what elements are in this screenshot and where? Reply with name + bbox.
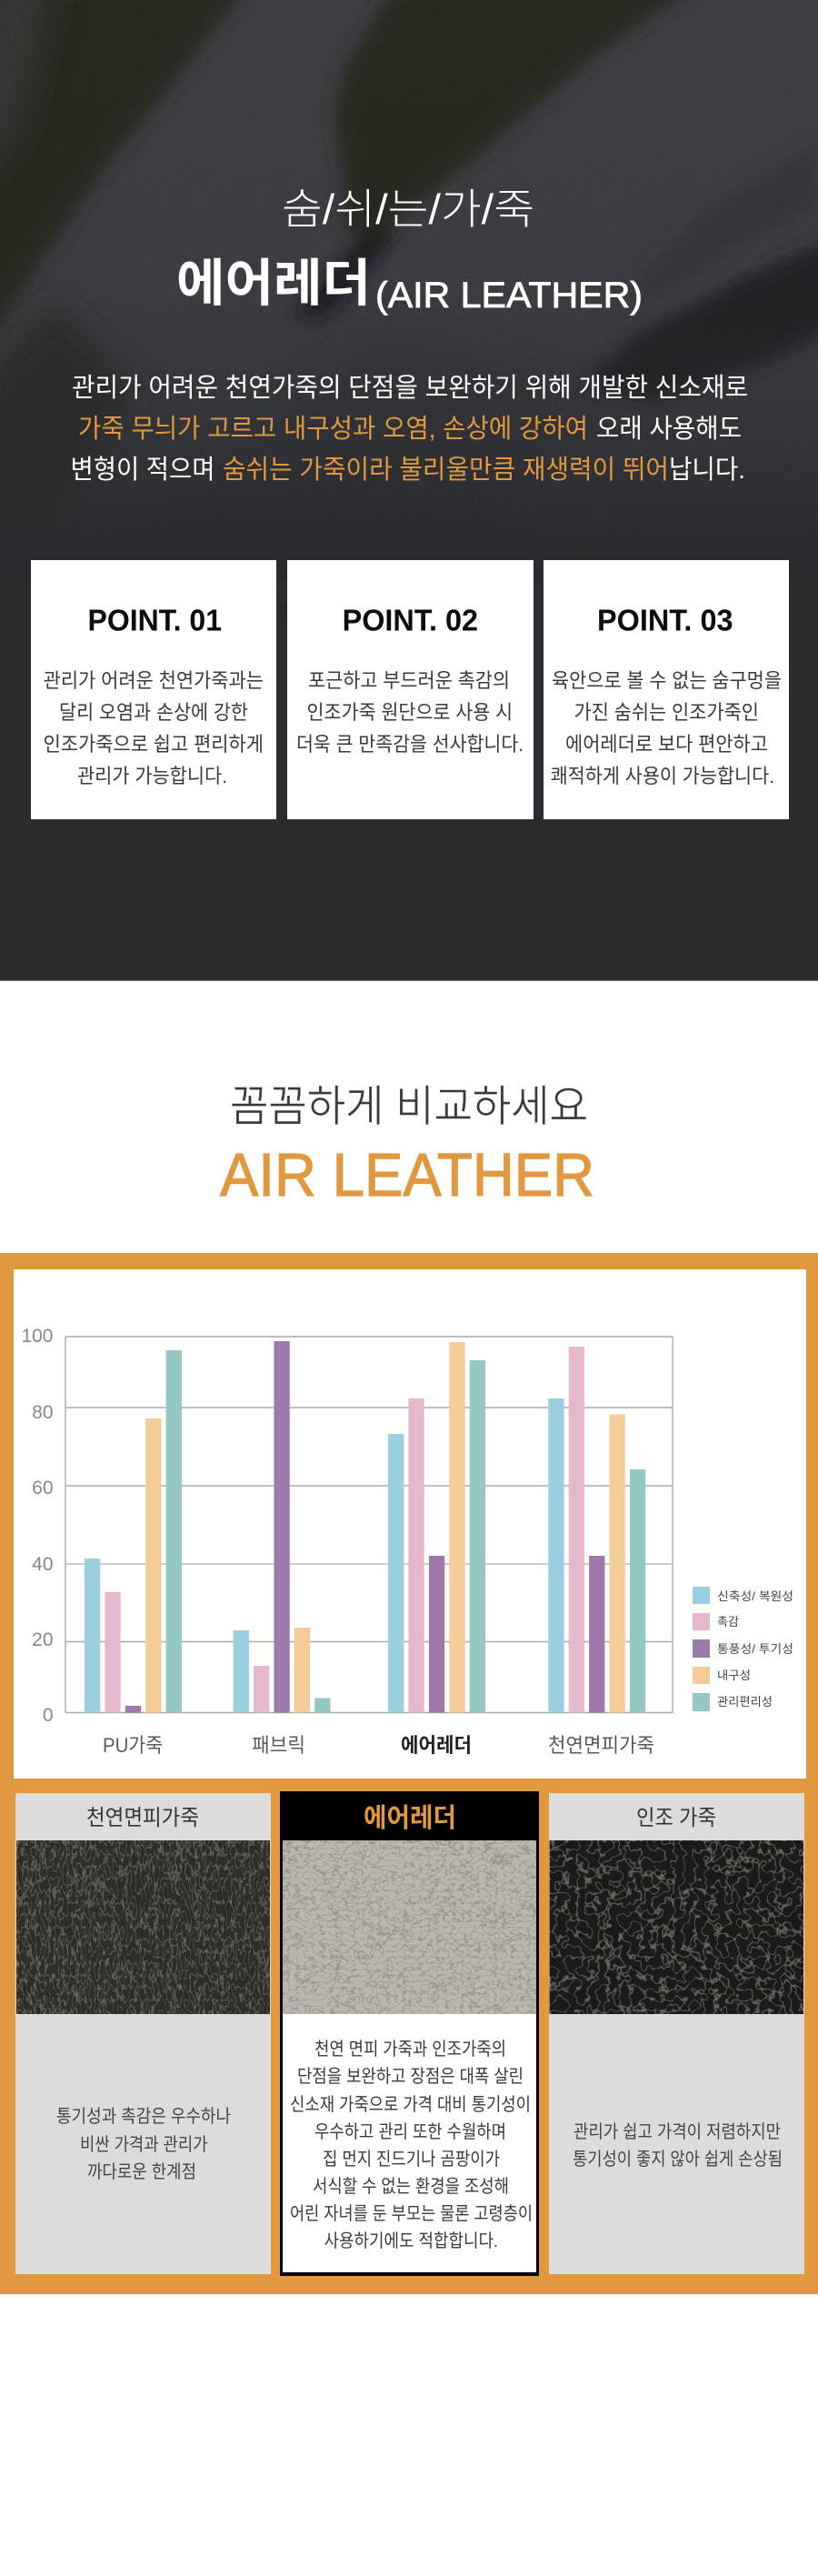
- natural leather text: [56, 2106, 231, 2182]
- point 01 text: 인조가죽으로 쉽고 편리하게: [44, 733, 264, 756]
- orange comparison background: [0, 1253, 818, 2294]
- natural leather swatch: [16, 1840, 270, 2014]
- artificial leather heading: 인조 가죽: [636, 1806, 716, 1830]
- point 03 text: 육안으로 볼 수 없는 숨구멍을: [552, 669, 782, 692]
- bars: 에어레더: [388, 1342, 485, 1713]
- point 01 text: 관리가 어려운 천연가죽과는: [44, 669, 264, 692]
- air leather heading: 에어레더: [364, 1803, 456, 1833]
- chart legend: [693, 1587, 793, 1711]
- panel: point 03: [544, 560, 789, 819]
- chart legend: 관리편리성: [717, 1695, 773, 1709]
- air leather text: 우수하고 관리 또한 수월하며: [314, 2121, 506, 2142]
- point 02 text: [296, 669, 524, 756]
- y axis labels: 0: [43, 1705, 53, 1726]
- point 03 text: 쾌적하게 사용이 가능합니다.: [551, 765, 774, 787]
- panel: point 02: [287, 560, 534, 819]
- hero subtitle: 숨/쉬/는/가/죽: [282, 185, 534, 233]
- bars: 패브릭: [234, 1341, 331, 1713]
- air leather text: 천연 면피 가죽과 인조가죽의: [314, 2039, 506, 2060]
- point 01 text: 관리가 가능합니다.: [77, 765, 227, 787]
- air leather text: 서식할 수 없는 환경을 조성해: [313, 2176, 509, 2197]
- leather folds backdrop: [0, 0, 818, 582]
- artificial leather swatch: [549, 1840, 803, 2014]
- category labels: 패브릭: [252, 1734, 305, 1757]
- section heading: air leather: AIR LEATHER: [220, 1141, 594, 1209]
- y axis labels: [21, 1326, 53, 1726]
- hero description: 관리가 어려운 천연가죽의 단점을 보완하기 위해 개발한 신소재로: [72, 373, 748, 403]
- hero section: dark leather background: [0, 0, 818, 981]
- point 03 text: [551, 669, 782, 787]
- point 03 text: 에어레더로 보다 편안하고: [565, 733, 768, 756]
- chart grid: [65, 1337, 673, 1713]
- y axis labels: 100: [21, 1326, 53, 1347]
- air leather text: 집 먼지 진드기나 곰팡이가: [323, 2149, 500, 2170]
- hero description: 가죽 무늬가 고르고 내구성과 오염, 손상에 강하여: [78, 414, 588, 444]
- natural leather text: 통기성과 촉감은 우수하나: [56, 2106, 231, 2127]
- chart legend: 통풍성/ 투기성: [717, 1642, 793, 1656]
- hero description: 숨쉬는 가죽이라 불리울만큼 재생력이 뛰어: [223, 456, 669, 485]
- y axis labels: 20: [32, 1629, 53, 1650]
- air leather text: [290, 2039, 533, 2251]
- point 01 text: [44, 669, 264, 787]
- hero description: 변형이 적으며: [71, 455, 214, 485]
- point 01 text: 달리 오염과 손상에 강한: [59, 701, 248, 724]
- panel: artificial leather card: [549, 1793, 804, 2274]
- panel: point 01: [31, 560, 276, 819]
- hero title: [176, 255, 643, 316]
- hero title: 에어레더: [176, 255, 371, 312]
- point 02 text: 인조가죽 원단으로 사용 시: [307, 701, 513, 724]
- panel: bar chart: [14, 1269, 806, 1779]
- artificial leather text: [573, 2121, 783, 2170]
- category labels: 천연면피가죽: [548, 1734, 654, 1757]
- hero description: 납니다.: [669, 456, 745, 485]
- point 02 heading: POINT. 02: [343, 604, 478, 636]
- panel: air leather card: [280, 1791, 539, 2276]
- air leather text: 단점을 보완하고 장점은 대폭 살린: [297, 2066, 524, 2087]
- chart legend: 내구성: [717, 1669, 751, 1682]
- natural leather heading: 천연면피가죽: [86, 1806, 199, 1830]
- chart legend: 촉감: [717, 1615, 739, 1629]
- artificial leather text: 관리가 쉽고 가격이 저렴하지만: [574, 2121, 781, 2142]
- section heading: compare: 꼼꼼하게 비교하세요: [230, 1082, 588, 1130]
- bars: 천연면피가죽: [548, 1347, 645, 1713]
- air leather text: 어린 자녀를 둔 부모는 물론 고령층이: [290, 2203, 533, 2224]
- hero description: 오래 사용해도: [596, 415, 742, 444]
- panel: natural leather card: [15, 1793, 271, 2274]
- y axis labels: 40: [32, 1554, 53, 1575]
- category labels: PU가죽: [103, 1734, 163, 1757]
- point 03 heading: POINT. 03: [597, 604, 733, 636]
- category labels: 에어레더: [401, 1734, 472, 1757]
- bars: PU가죽: [85, 1350, 182, 1713]
- point 01 heading: POINT. 01: [87, 604, 222, 636]
- chart legend: 신축성/ 복원성: [717, 1589, 793, 1603]
- air leather text: 사용하기에도 적합합니다.: [324, 2230, 498, 2251]
- y axis labels: 80: [32, 1402, 53, 1423]
- hero description: [71, 373, 748, 485]
- point 02 text: 더욱 큰 만족감을 선사합니다.: [296, 733, 524, 756]
- air leather swatch: [283, 1840, 536, 2014]
- hero title: (AIR LEATHER): [375, 276, 643, 316]
- point 02 text: 포근하고 부드러운 촉감의: [308, 669, 510, 692]
- natural leather text: 비싼 가격과 관리가: [80, 2134, 207, 2155]
- category labels: [103, 1734, 654, 1757]
- point 03 text: 가진 숨쉬는 인조가죽인: [574, 701, 759, 724]
- y axis labels: 60: [32, 1478, 53, 1498]
- natural leather text: 까다로운 한계점: [87, 2161, 196, 2182]
- artificial leather text: 통기성이 좋지 않아 쉽게 손상됨: [573, 2149, 783, 2170]
- air leather text: 신소재 가죽으로 가격 대비 통기성이: [290, 2094, 531, 2115]
